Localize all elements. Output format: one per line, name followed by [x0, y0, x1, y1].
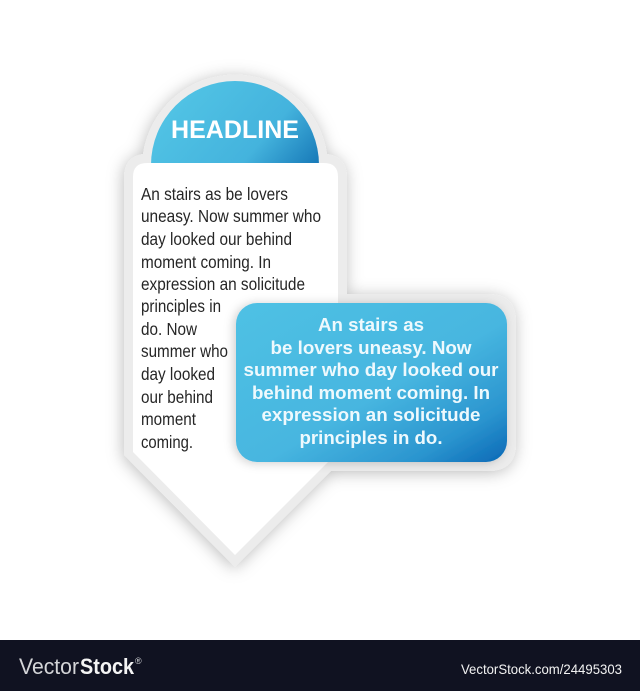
footer logo: Stock — [80, 654, 134, 679]
blue rounded message box — [236, 303, 507, 462]
message box text: summer who day looked our — [244, 360, 498, 380]
message box text — [244, 315, 498, 448]
footer logo: Vector — [19, 654, 79, 679]
message box text: behind moment coming. In — [252, 383, 490, 403]
body text block: An stairs as be lovers — [141, 184, 288, 204]
footer logo — [19, 654, 142, 679]
message box text: An stairs as — [318, 315, 424, 335]
body text block — [141, 184, 321, 452]
message box text: be lovers uneasy. Now — [270, 338, 473, 358]
body text block: our behind — [141, 387, 213, 407]
footer logo: ® — [135, 656, 142, 666]
body text block: day looked our behind — [141, 229, 292, 249]
body text block: do. Now — [141, 319, 198, 339]
body text block: moment — [141, 409, 196, 429]
body text block: day looked — [141, 364, 215, 384]
body text block: coming. — [141, 432, 193, 452]
body text block: expression an solicitude — [141, 274, 305, 294]
message box text: principles in do. — [300, 428, 442, 448]
body text block: summer who — [141, 341, 228, 361]
callout frame: light grey outer silhouette — [124, 75, 516, 567]
body text block: uneasy. Now summer who — [141, 206, 321, 226]
white arrow panel — [133, 163, 338, 555]
body text block: principles in — [141, 296, 221, 316]
headline semicircle — [151, 81, 319, 172]
watermark footer bar — [0, 640, 640, 691]
footer url: VectorStock.com/24495303 — [461, 661, 622, 677]
headline text: HEADLINE — [171, 116, 299, 144]
message box text: expression an solicitude — [262, 405, 480, 425]
body text block: moment coming. In — [141, 252, 271, 272]
